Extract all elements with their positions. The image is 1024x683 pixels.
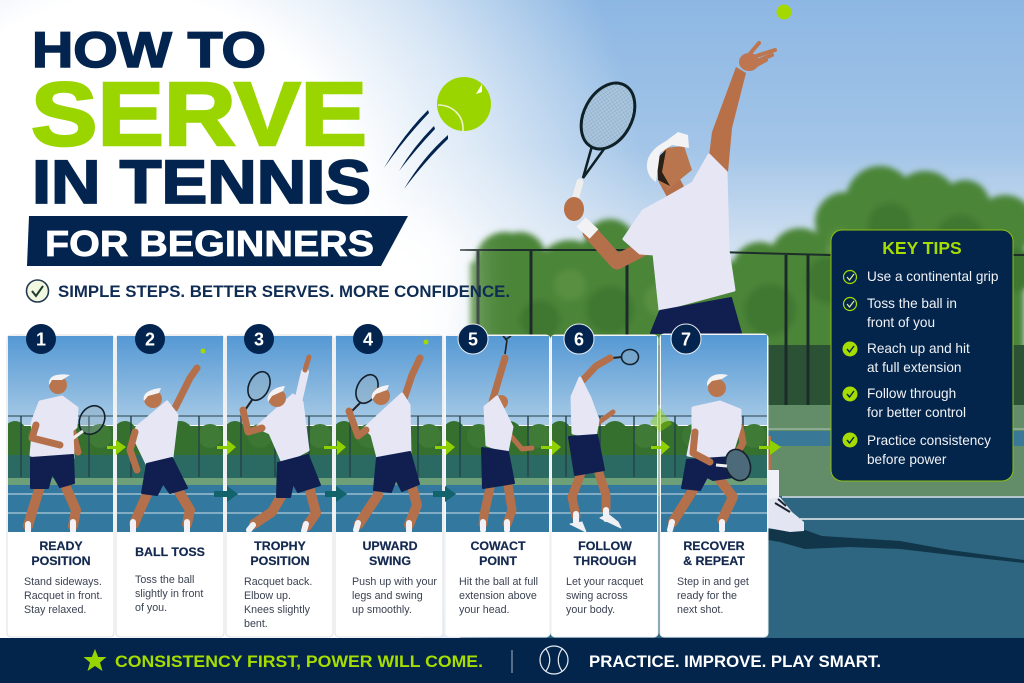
- hitting hand: [564, 197, 584, 221]
- step number badges: 2: [145, 330, 155, 350]
- panel: step 6 follow through: [549, 335, 662, 637]
- step 3 text: bent.: [244, 618, 268, 630]
- shirt: [624, 155, 734, 310]
- panel: step 7 recover and repeat: [658, 334, 771, 637]
- banner: for beginners: FOR BEGINNERS: [45, 223, 374, 264]
- court shadow: [768, 529, 1024, 563]
- step number badges: 3: [254, 330, 264, 350]
- step 3 text: Elbow up.: [244, 590, 291, 602]
- step number badges: 4: [363, 330, 373, 350]
- subtitle with check icon: SIMPLE STEPS. BETTER SERVES. MORE CONFIDENCE.: [58, 282, 510, 301]
- hair: [657, 150, 670, 186]
- step number badges: 5: [468, 330, 478, 350]
- step 5 text: your head.: [459, 604, 510, 616]
- tip list: Practice consistency: [867, 433, 991, 448]
- step 3 text: Racquet back.: [244, 576, 312, 588]
- panel: step 1 ready position: [4, 335, 117, 637]
- tip list: for better control: [867, 405, 966, 420]
- tennis ball: [776, 4, 792, 20]
- step 3 heading: POSITION: [250, 554, 310, 568]
- step 4 heading: SWING: [369, 554, 411, 568]
- icon: star: [84, 649, 106, 671]
- panel: step 3 trophy position: [224, 335, 337, 637]
- in tennis: IN TENNIS: [32, 148, 371, 216]
- how to: HOW TO: [32, 22, 266, 78]
- main player: [564, 43, 804, 532]
- step 3 text: Knees slightly: [244, 604, 311, 616]
- wristband: [581, 222, 594, 234]
- step 6 heading: FOLLOW: [578, 539, 632, 553]
- footer left message: CONSISTENCY FIRST, POWER WILL COME.: [115, 652, 483, 671]
- step 6 text: swing across: [566, 590, 628, 602]
- step 2 text: of you.: [135, 602, 167, 614]
- step 2 text: slightly in front: [135, 588, 203, 600]
- step 1 text: Racquet in front.: [24, 590, 102, 602]
- cap: [647, 132, 689, 182]
- icon: tennis ball with motion streaks: [384, 77, 491, 189]
- panel: step 5 contact point: [443, 335, 556, 637]
- neck: [668, 178, 680, 200]
- main racquet: [570, 74, 646, 207]
- step number badges: 7: [681, 330, 691, 350]
- panel: key tips: [831, 230, 1013, 481]
- tossing hand: [739, 43, 775, 71]
- step 6 text: your body.: [566, 604, 615, 616]
- step 4 heading: UPWARD: [362, 539, 418, 553]
- step 7 text: next shot.: [677, 604, 723, 616]
- shorts: [651, 298, 741, 333]
- white base behind the step cards: [0, 320, 420, 640]
- step 4 text: legs and swing: [352, 590, 423, 602]
- step 7 heading: RECOVER: [683, 539, 745, 553]
- banner: for beginners: [27, 216, 408, 266]
- step 5 heading: POINT: [479, 554, 517, 568]
- step number badges: [26, 324, 701, 354]
- step 1 heading: READY: [39, 539, 83, 553]
- tip list: Follow through: [867, 386, 956, 401]
- icon: ball outline: [540, 646, 568, 674]
- white left fade: [0, 225, 455, 640]
- step 6 text: Let your racquet: [566, 576, 643, 588]
- step 5 text: extension above: [459, 590, 537, 602]
- arrows: green, upper row: [107, 408, 781, 455]
- step 4 text: up smoothly.: [352, 604, 412, 616]
- step 1 text: Stay relaxed.: [24, 604, 86, 616]
- key tips heading: KEY TIPS: [882, 238, 962, 258]
- step 2 text: Toss the ball: [135, 574, 194, 586]
- step 7 heading: & REPEAT: [683, 554, 745, 568]
- panel: step 4 upward swing: [333, 335, 446, 637]
- tip list: Reach up and hit: [867, 341, 970, 356]
- step 1 heading: POSITION: [31, 554, 91, 568]
- tip list: front of you: [867, 315, 935, 330]
- hitting arm: [590, 232, 650, 262]
- step 4 text: Push up with your: [352, 576, 437, 588]
- step 5 heading: COWACT: [470, 539, 526, 553]
- step number badges: 6: [574, 330, 584, 350]
- step 2 heading: BALL TOSS: [135, 545, 205, 559]
- step 7 text: ready for the: [677, 590, 737, 602]
- panel: step 2 ball toss: [114, 335, 227, 637]
- footer bar: [0, 638, 1024, 683]
- tossing arm: [709, 67, 746, 172]
- step 7 text: Step in and get: [677, 576, 749, 588]
- far leg and shoe: [768, 436, 804, 532]
- tip list: before power: [867, 452, 947, 467]
- tip icons: [842, 270, 858, 448]
- trees: [470, 166, 1024, 365]
- head: [657, 146, 692, 190]
- tip list: at full extension: [867, 360, 961, 375]
- arrows: teal, lower row: [214, 486, 456, 502]
- step number badges: 1: [36, 330, 46, 350]
- tip list: Use a continental grip: [867, 269, 998, 284]
- court surface: [460, 405, 1024, 496]
- title: [31, 22, 371, 216]
- step 6 heading: THROUGH: [574, 554, 636, 568]
- step 1 text: Stand sideways.: [24, 576, 102, 588]
- step 5 text: Hit the ball at full: [459, 576, 538, 588]
- tip list: Toss the ball in: [867, 296, 957, 311]
- step 3 heading: TROPHY: [254, 539, 307, 553]
- footer right message: PRACTICE. IMPROVE. PLAY SMART.: [589, 652, 881, 671]
- serve: SERVE: [31, 65, 367, 165]
